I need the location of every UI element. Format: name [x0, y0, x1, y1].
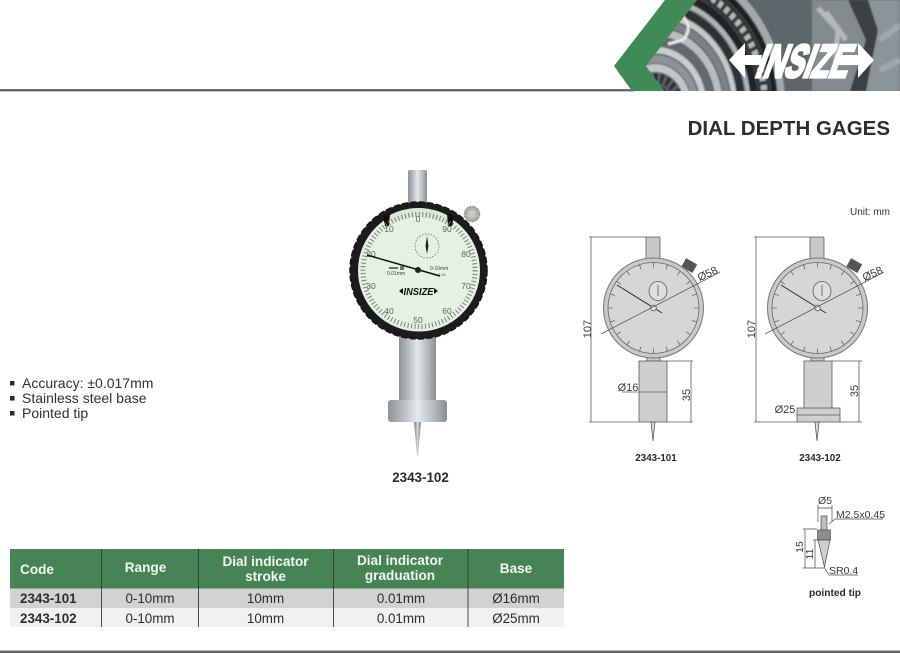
bezel	[350, 202, 487, 339]
upper stem	[408, 170, 427, 206]
tip labels: 15	[794, 541, 806, 553]
footer rule	[0, 650, 900, 653]
table header row	[10, 549, 564, 588]
pointed tip	[414, 422, 421, 456]
tip labels: M2.5x0.45	[836, 509, 885, 521]
technical drawing 2343-102	[746, 237, 885, 441]
dial logo: INSIZE	[404, 286, 434, 298]
spec table	[10, 549, 564, 627]
dial small text	[387, 266, 448, 277]
dial numerals: 0	[416, 214, 421, 224]
tip labels: 11	[804, 548, 816, 559]
neck	[647, 357, 660, 361]
feature list: Stainless steel base	[22, 390, 147, 406]
product photo: dial depth gage	[350, 170, 487, 456]
table header row: stroke	[245, 569, 286, 584]
main needle	[367, 255, 440, 276]
dial numerals: 80	[461, 249, 471, 259]
dial small text: 0-10mm	[430, 266, 448, 272]
dim 107	[754, 237, 810, 422]
table row 2343-101: 10mm	[247, 591, 284, 606]
base	[797, 408, 840, 422]
dim labels: 107	[746, 320, 758, 338]
dial ticks	[774, 265, 860, 351]
table row 2343-101: 2343-101	[20, 591, 77, 606]
dim labels	[582, 265, 720, 401]
table header row: Code	[20, 562, 54, 577]
dial numerals: 60	[442, 306, 452, 316]
dial ticks	[610, 265, 696, 351]
drawing caption 2343-102: 2343-102	[799, 453, 841, 464]
dial inner	[608, 262, 699, 354]
dial numerals: 30	[366, 281, 376, 291]
dimension lines	[803, 505, 883, 575]
dim labels: 35	[681, 389, 693, 401]
tip knurl	[818, 530, 830, 540]
neck	[811, 357, 824, 361]
pointed tip caption: pointed tip	[809, 588, 861, 599]
feature list: Accuracy: ±0.017mm	[22, 375, 153, 391]
dim 58 leader	[765, 272, 884, 334]
dim labels: 107	[582, 320, 594, 338]
dial numerals: 90	[442, 224, 452, 234]
dial outer	[768, 258, 868, 358]
tip thread	[821, 516, 827, 530]
table row 2343-102: 0-10mm	[125, 611, 175, 626]
dim 35	[832, 361, 862, 422]
table row 2343-101: Ø16mm	[492, 591, 540, 606]
table header row: Dial indicator	[357, 553, 444, 568]
table row 2343-102: 10mm	[247, 611, 284, 626]
dial face	[358, 210, 480, 332]
dim labels: Ø16	[618, 382, 638, 394]
tip	[651, 422, 655, 441]
unit note: Unit: mm	[850, 207, 890, 218]
dim 35	[667, 361, 693, 422]
dial numerals: 40	[384, 306, 394, 316]
tip labels: Ø5	[818, 495, 832, 507]
dim labels: Ø58	[696, 265, 720, 284]
dial numerals: 10	[384, 224, 394, 234]
subdial	[813, 282, 831, 300]
table row 2343-102: 0.01mm	[377, 611, 425, 626]
machinery photo	[646, 0, 900, 91]
lower stem	[399, 334, 436, 402]
dial graduations	[363, 214, 475, 326]
dim 16	[622, 391, 667, 393]
feature list: Pointed tip	[22, 405, 88, 421]
dial small text: 0.01	[438, 272, 447, 277]
table header row: Range	[125, 560, 167, 575]
table row 2343-102: 2343-102	[20, 611, 77, 626]
dim labels: Ø25	[775, 404, 795, 416]
crown	[847, 259, 862, 272]
drawing caption 2343-101: 2343-101	[635, 453, 677, 464]
table row 2343-101	[10, 588, 564, 608]
dial numerals: 20	[366, 249, 376, 259]
dial outer	[604, 258, 704, 358]
tip labels	[794, 495, 885, 577]
base	[388, 400, 447, 422]
table header row: Dial indicator	[222, 554, 309, 569]
pointed tip detail drawing	[794, 495, 885, 577]
table header row: Base	[500, 561, 533, 576]
table row 2343-101: 0-10mm	[125, 591, 175, 606]
dim labels: 35	[849, 385, 861, 397]
table row 2343-102	[10, 608, 564, 627]
header rule	[0, 89, 634, 91]
dim 58 leader	[601, 272, 720, 334]
sub dial	[415, 234, 439, 258]
body	[804, 361, 832, 409]
header banner	[614, 0, 900, 91]
subdial	[649, 282, 667, 300]
top window	[385, 208, 452, 226]
dim labels: Ø58	[861, 265, 885, 284]
body	[639, 361, 667, 422]
tip	[815, 422, 819, 441]
product code caption: 2343-102	[392, 470, 449, 485]
dim 107	[589, 237, 646, 422]
dial inner	[772, 262, 863, 354]
dim 25	[797, 414, 840, 416]
dial numerals: 70	[461, 281, 471, 291]
tip cone	[818, 540, 830, 567]
needle	[617, 285, 662, 313]
dim labels	[746, 265, 885, 416]
feature list	[10, 375, 153, 421]
dial numerals	[366, 214, 471, 325]
title: DIAL DEPTH GAGES	[688, 117, 890, 140]
crown	[682, 259, 697, 272]
table row 2343-101: 0.01mm	[377, 591, 425, 606]
dial small text: 0.01mm	[387, 271, 405, 277]
dial numerals: 50	[413, 315, 423, 325]
green chevron	[614, 0, 697, 91]
table header row: graduation	[365, 568, 435, 583]
technical drawing 2343-101	[582, 237, 720, 441]
table row 2343-102: Ø25mm	[492, 611, 540, 626]
stem top	[810, 237, 824, 258]
needle	[781, 285, 826, 313]
tip labels: SR0.4	[829, 565, 858, 577]
stem top	[646, 237, 660, 258]
adjusting crown	[464, 206, 480, 222]
